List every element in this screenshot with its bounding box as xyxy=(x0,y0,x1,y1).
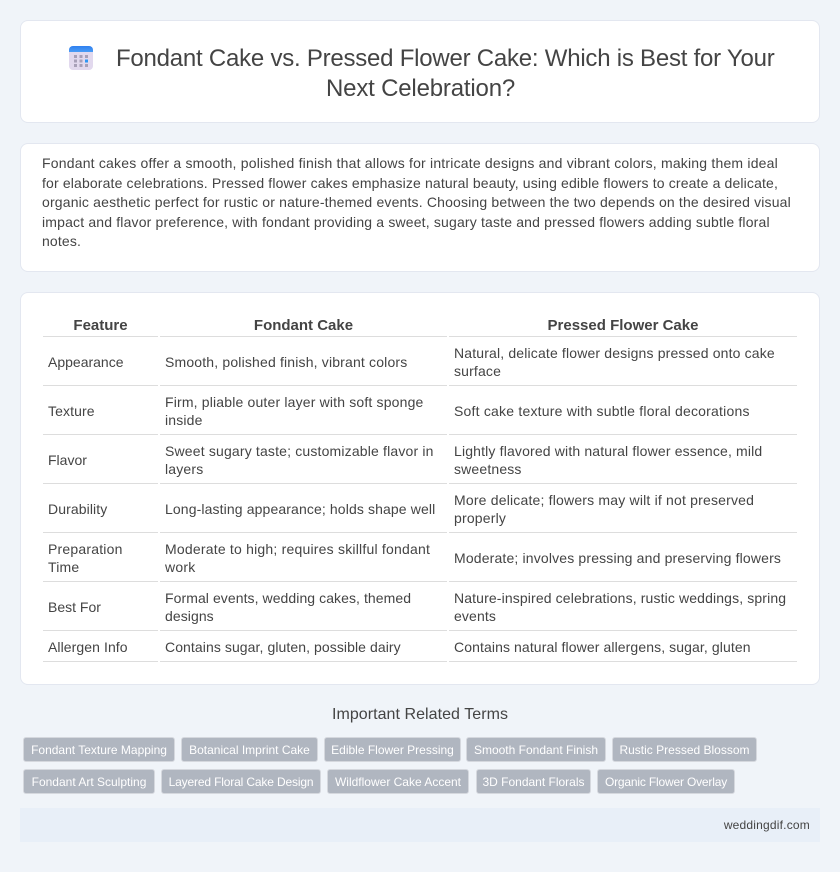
title: Next Celebration? xyxy=(326,75,515,102)
tag: Fondant Art Sculpting xyxy=(32,775,146,789)
row: Best For: Best For xyxy=(48,599,101,615)
comparison table: surface xyxy=(454,363,501,379)
comparison table: Natural, delicate flower designs pressed onto cake xyxy=(454,345,775,361)
tag xyxy=(597,769,735,794)
row: Preparation Time: Preparation xyxy=(48,541,123,557)
tag xyxy=(476,769,591,794)
tag xyxy=(612,737,757,762)
comparison table: Formal events, wedding cakes, themed xyxy=(165,590,411,606)
comparison table: inside xyxy=(165,412,203,428)
column header: Pressed Flower Cake xyxy=(449,316,797,337)
comparison table: work xyxy=(165,559,195,575)
comparison table: More delicate; flowers may wilt if not preserved xyxy=(454,492,754,508)
tag xyxy=(327,769,469,794)
column header: Pressed Flower Cake: Pressed Flower Cake xyxy=(548,317,698,334)
intro paragraph: notes. xyxy=(42,233,81,249)
comparison table: sweetness xyxy=(454,461,522,477)
tag: Smooth Fondant Finish xyxy=(474,743,598,757)
tag: Edible Flower Pressing xyxy=(331,743,454,757)
title xyxy=(116,45,774,102)
row: Flavor: Flavor xyxy=(48,452,87,468)
related terms tags xyxy=(23,737,757,794)
tag: Botanical Imprint Cake xyxy=(189,743,310,757)
comparison table: designs xyxy=(165,608,214,624)
tag xyxy=(23,737,175,762)
comparison table: Moderate to high; requires skillful fondant xyxy=(165,541,430,557)
comparison table: Long-lasting appearance; holds shape well xyxy=(165,501,435,517)
tag: Organic Flower Overlay xyxy=(605,775,727,789)
comparison table: Soft cake texture with subtle floral decorations xyxy=(454,403,750,419)
row: Texture: Texture xyxy=(48,403,95,419)
column header: Feature xyxy=(43,316,158,337)
intro paragraph xyxy=(42,155,791,249)
tag: Fondant Texture Mapping xyxy=(31,743,167,757)
row: Durability: Durability xyxy=(48,501,107,517)
row: Preparation Time: Time xyxy=(48,559,79,575)
comparison table: Sweet sugary taste; customizable flavor in xyxy=(165,443,434,459)
comparison table panel xyxy=(20,292,820,685)
tag: Layered Floral Cake Design xyxy=(169,775,313,789)
comparison table: Moderate; involves pressing and preserving flowers xyxy=(454,550,781,566)
tag xyxy=(181,737,318,762)
comparison table: Firm, pliable outer layer with soft sponge xyxy=(165,394,423,410)
icon: calendar xyxy=(69,46,93,70)
tag xyxy=(324,737,461,762)
intro paragraph: impact and flavor preference, with fondant providing a sweet, sugary taste and pressed flowers adding subtle floral xyxy=(42,214,770,230)
comparison table: Contains natural flower allergens, sugar, gluten xyxy=(454,639,751,655)
footer bar xyxy=(20,808,820,842)
intro paragraph: Fondant cakes offer a smooth, polished finish that allows for intricate designs and vibrant colors, making them ideal xyxy=(42,155,778,171)
header card xyxy=(20,20,820,123)
tag xyxy=(23,769,155,794)
row: Appearance: Appearance xyxy=(48,354,124,370)
tag xyxy=(161,769,321,794)
comparison table: events xyxy=(454,608,496,624)
title: Fondant Cake vs. Pressed Flower Cake: Which is Best for Your xyxy=(116,45,774,72)
comparison table: layers xyxy=(165,461,203,477)
related terms heading: Important Related Terms xyxy=(332,706,508,723)
comparison table: Nature-inspired celebrations, rustic weddings, spring xyxy=(454,590,786,606)
intro paragraph: for elaborate celebrations. Pressed flower cakes emphasize natural beauty, using edible flowers to create a delicate, xyxy=(42,174,778,190)
row: Preparation Time xyxy=(48,541,123,575)
intro paragraph: organic aesthetic perfect for rustic or nature-themed events. Choosing between the two depends on the desired visual xyxy=(42,194,791,210)
footer source text: weddingdif.com xyxy=(724,818,810,832)
comparison table: Contains sugar, gluten, possible dairy xyxy=(165,639,401,655)
tag: Rustic Pressed Blossom xyxy=(619,743,750,757)
column header: Fondant Cake: Fondant Cake xyxy=(254,317,353,334)
column header: Feature: Feature xyxy=(73,317,128,334)
tag: 3D Fondant Florals xyxy=(482,775,585,789)
intro text panel xyxy=(20,143,820,272)
tag: Wildflower Cake Accent xyxy=(335,775,461,789)
row: Allergen Info: Allergen Info xyxy=(48,639,128,655)
column header: Fondant Cake xyxy=(160,316,447,337)
comparison table: properly xyxy=(454,510,506,526)
comparison table: Smooth, polished finish, vibrant colors xyxy=(165,354,407,370)
tag xyxy=(466,737,606,762)
comparison table: Lightly flavored with natural flower essence, mild xyxy=(454,443,762,459)
